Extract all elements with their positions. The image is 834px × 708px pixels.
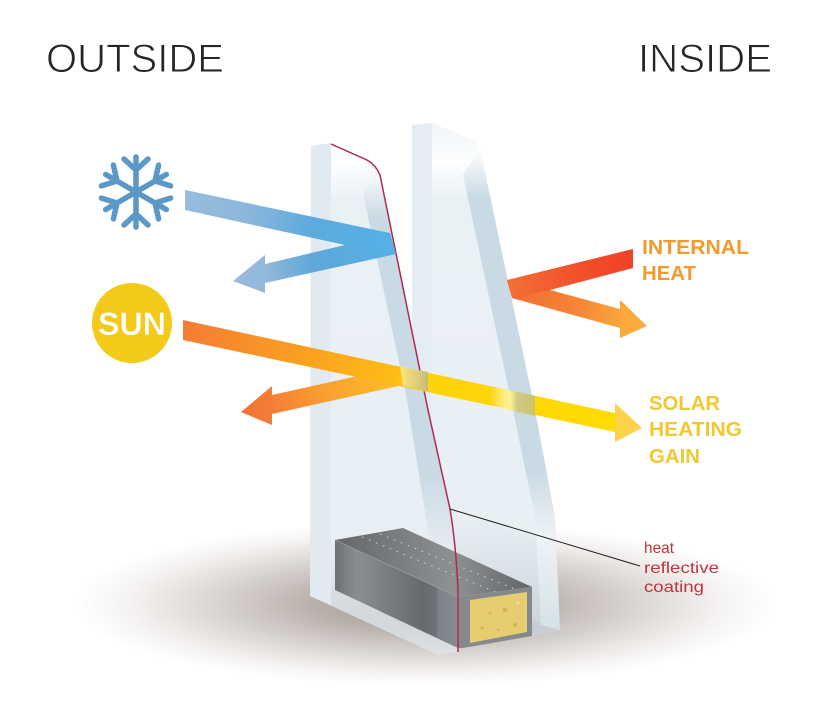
ground shadow <box>75 522 775 686</box>
label: heat reflective coating: reflective <box>644 560 719 577</box>
icon: sun: SUN <box>98 306 166 342</box>
label: internal heat: INTERNAL <box>642 237 749 259</box>
label: heat reflective coating <box>644 540 719 596</box>
label: heat reflective coating: coating <box>644 579 704 596</box>
spacer end <box>458 587 532 648</box>
left glass pane <box>310 143 458 655</box>
right pane edge <box>463 148 560 630</box>
arrow: internal heat <box>507 249 647 338</box>
spacer top <box>335 528 532 597</box>
arrow: solar transmitted <box>183 320 642 442</box>
arrow: solar reflected <box>241 366 403 425</box>
label: internal heat: HEAT <box>642 263 696 285</box>
icon: sun <box>92 283 172 363</box>
label: internal heat <box>642 237 749 285</box>
right glass pane <box>412 123 560 645</box>
label: solar heating gain <box>649 393 742 468</box>
label: solar heating gain: GAIN <box>649 446 700 468</box>
sponge desiccant <box>470 592 527 643</box>
leader line <box>450 509 640 566</box>
label: solar heating gain: SOLAR <box>649 393 721 415</box>
glass overlay on spacer <box>437 587 458 648</box>
spacer bar <box>335 528 532 648</box>
label: heat reflective coating: heat <box>644 540 675 557</box>
spacer front side <box>335 540 458 648</box>
icon: snowflake <box>100 157 172 227</box>
heat reflective coating line <box>331 144 458 652</box>
heading: inside: INSIDE <box>638 37 772 81</box>
left pane edge <box>363 170 458 600</box>
label: solar heating gain: HEATING <box>649 419 742 441</box>
heading: outside: OUTSIDE <box>46 37 224 81</box>
arrow: cold reflected <box>185 190 396 293</box>
